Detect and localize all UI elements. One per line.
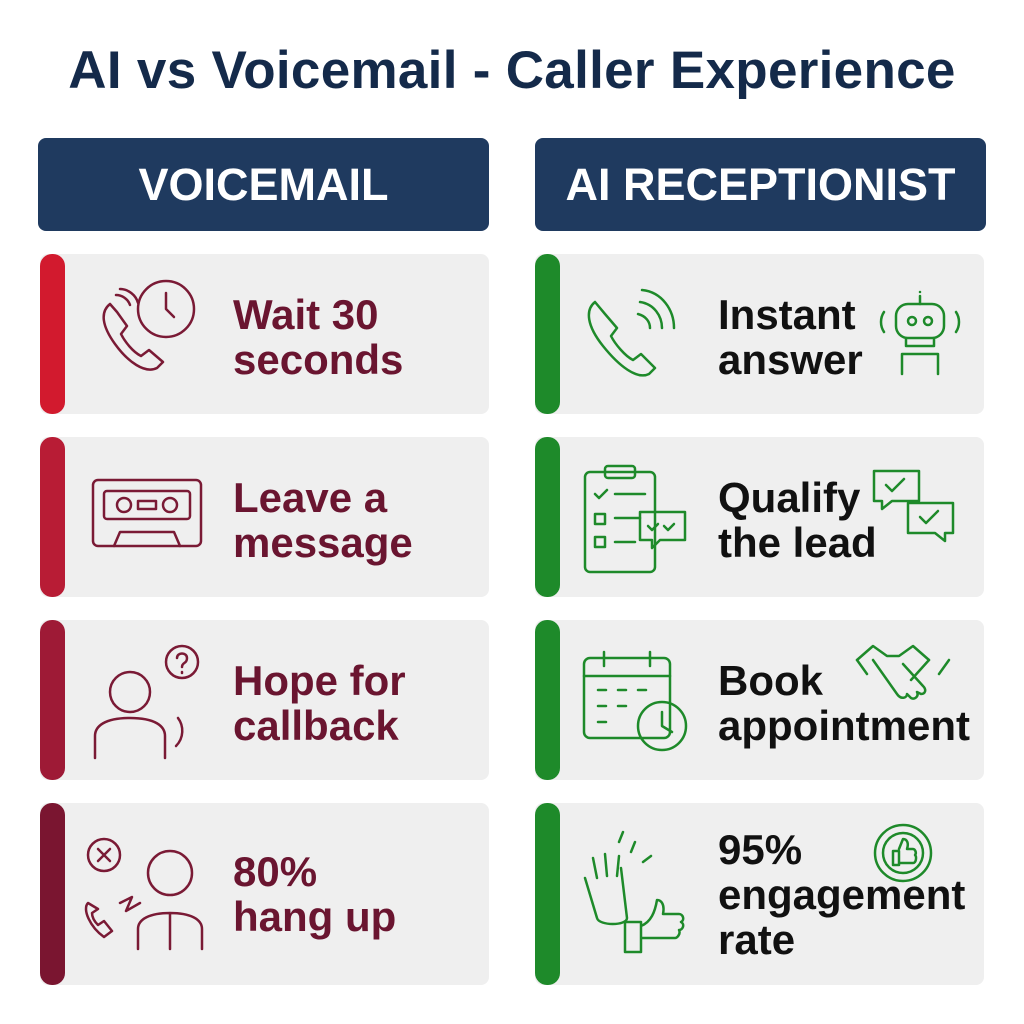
header: ai receptionist: AI RECEPTIONIST	[565, 159, 956, 210]
text	[233, 657, 406, 749]
icon: chat checks	[872, 470, 954, 542]
text: seconds	[233, 336, 403, 383]
text: Wait 30	[233, 291, 378, 338]
text	[718, 291, 863, 383]
text	[718, 657, 970, 749]
text	[718, 826, 965, 963]
icon: checklist	[584, 464, 686, 574]
title: AI vs Voicemail - Caller Experience	[68, 41, 956, 100]
panel: 80% hang up	[40, 803, 489, 985]
text: Book	[718, 657, 823, 704]
panel: leave a message	[40, 437, 489, 597]
header: voicemail	[38, 138, 489, 231]
text: hang up	[233, 893, 396, 940]
text: appointment	[718, 702, 970, 749]
icon: phone ringing	[588, 288, 676, 377]
text: Instant	[718, 291, 856, 338]
text	[233, 291, 403, 383]
icon: badge thumbs	[874, 824, 932, 882]
header: voicemail: VOICEMAIL	[138, 159, 388, 210]
panel: 95% engagement rate	[535, 803, 984, 985]
text: Hope for	[233, 657, 406, 704]
text: answer	[718, 336, 863, 383]
text: callback	[233, 702, 399, 749]
text: Qualify	[718, 474, 860, 521]
icon: handshake	[856, 644, 950, 700]
panel: qualify the lead	[535, 437, 984, 597]
text	[233, 848, 396, 940]
text: rate	[718, 916, 795, 963]
text: message	[233, 519, 413, 566]
text: engagement	[718, 871, 965, 918]
icon: calendar clock	[582, 650, 688, 752]
text	[718, 474, 877, 566]
panel: wait 30 seconds	[40, 254, 489, 414]
icon: robot	[880, 290, 960, 376]
icon: high five thumbs up	[584, 830, 684, 954]
icon: angry caller	[84, 838, 204, 950]
panel: hope for callback	[40, 620, 489, 780]
text: 80%	[233, 848, 317, 895]
icon: phone clock	[102, 280, 196, 371]
icon: cassette	[92, 478, 202, 548]
header: ai receptionist	[535, 138, 986, 231]
text	[233, 474, 413, 566]
text: Leave a	[233, 474, 387, 521]
text: 95%	[718, 826, 802, 873]
panel: instant answer	[535, 254, 984, 414]
panel: book appointment	[535, 620, 984, 780]
text: the lead	[718, 519, 877, 566]
icon: worried person	[94, 644, 200, 760]
